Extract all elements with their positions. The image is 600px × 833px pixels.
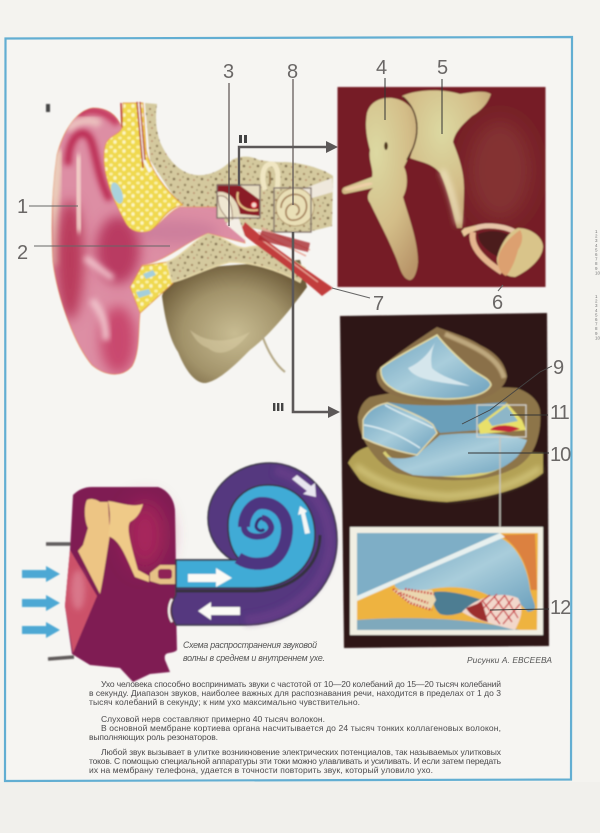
yellow rim of lower whorl xyxy=(384,448,520,476)
deep red helix top xyxy=(78,110,118,124)
mastoid bone mass xyxy=(162,260,307,383)
margin line numbers upper: 3 xyxy=(595,238,598,243)
white arrow in blue coil xyxy=(298,506,310,534)
diagram caption: волны в среднем и внутреннем ухе. xyxy=(183,653,325,663)
paragraph 3: их на мембрану телефона, удается в точности повторить звук, который уловило ухо. xyxy=(89,765,433,775)
roman numeral III xyxy=(273,403,283,411)
diagram: sound wave propagation xyxy=(22,463,337,682)
diagram caption xyxy=(183,640,325,663)
diagram caption: Схема распространения звуковой xyxy=(183,640,317,650)
white arrow upper coil xyxy=(292,475,316,497)
malleus xyxy=(342,98,418,280)
body text xyxy=(89,679,502,775)
margin line numbers lower: 8 xyxy=(595,326,598,331)
lobe colour xyxy=(100,306,136,374)
stapes interior shadow xyxy=(478,231,510,258)
inset red cells xyxy=(393,589,434,610)
label 6 with leader: 6 xyxy=(492,292,503,314)
stapes schematic xyxy=(150,565,176,584)
paragraph 3 xyxy=(89,747,502,775)
label 12 with leader: 12 xyxy=(550,597,571,619)
purple coil shading xyxy=(245,470,330,620)
stapes footplate xyxy=(497,228,543,277)
lower temporal bone xyxy=(167,233,305,282)
inset left cell rows xyxy=(392,590,436,610)
blue tube and whorl xyxy=(176,485,315,588)
lower whorl tube folds xyxy=(364,405,433,448)
margin line numbers lower: 7 xyxy=(595,322,598,327)
inset orange tissue xyxy=(357,533,538,630)
inset upper right orange-red xyxy=(500,534,537,590)
box detail: red organ xyxy=(490,425,520,432)
label 4 with leader: 4 xyxy=(376,57,387,79)
highlighted frame xyxy=(477,405,526,437)
margin line numbers lower: 5 xyxy=(595,312,598,317)
incus schematic xyxy=(108,501,149,582)
malleus schematic xyxy=(78,499,110,594)
inset panel, white mount xyxy=(350,527,543,635)
middle ear cavity xyxy=(217,185,260,218)
box detail: blue duct xyxy=(488,406,518,426)
arrow to panel III xyxy=(293,232,340,418)
paragraph 2: Слуховой нерв составляют примерно 40 тысяч волокон. xyxy=(101,714,325,724)
margin line numbers upper: 9 xyxy=(595,266,598,271)
stapes hole xyxy=(158,569,172,579)
margin line numbers lower: 4 xyxy=(595,308,598,313)
semicircular canal xyxy=(263,164,278,190)
margin line numbers upper: 10 xyxy=(595,270,600,275)
malleus handle highlight xyxy=(345,183,372,190)
paragraph 1 xyxy=(89,679,501,707)
pale helix band xyxy=(68,121,100,130)
margin line numbers lower: 6 xyxy=(595,317,598,322)
tympanic ring rods xyxy=(46,544,74,659)
mid highlight xyxy=(85,258,113,278)
bundle stripes xyxy=(258,228,318,282)
inset red organ of Corti xyxy=(462,595,521,630)
blue sound arrow 3 xyxy=(22,622,60,638)
label 5 with leader xyxy=(437,57,448,134)
margin line numbers upper: 4 xyxy=(595,243,598,248)
cochlea outer purple coil xyxy=(172,463,337,625)
label 10 with leader xyxy=(468,444,571,466)
inset blue chamber xyxy=(395,538,535,612)
middle duct of lower whorl xyxy=(387,402,507,433)
lower whorl left blue tube xyxy=(363,403,437,455)
margin line numbers lower: 2 xyxy=(595,299,598,304)
paragraph 1: в секунду. Диапазон звуков, наиболее важных для распознавания речи, находится в пределах от 1 до 3 xyxy=(89,688,501,698)
white arrow in scala vestibuli xyxy=(188,568,232,587)
paragraph 3: токов. С помощью специальной аппаратуры эти токи можно улавливать и усиливать. И если затем передать xyxy=(89,756,502,766)
inset tunnel dark blue xyxy=(433,591,482,615)
label 5 with leader: 5 xyxy=(437,57,448,79)
panel III: cochlea section xyxy=(340,313,549,648)
round window arc xyxy=(169,599,172,622)
inset bottom blue band xyxy=(357,618,520,630)
label 1 with leader xyxy=(17,196,78,218)
inset background blue xyxy=(357,533,500,596)
paragraph 2 xyxy=(89,714,501,742)
roman numeral I xyxy=(46,104,50,112)
auditory nerve xyxy=(300,178,333,200)
label 4 with leader xyxy=(376,57,387,120)
tube lower dark line xyxy=(176,535,320,591)
inset light membrane xyxy=(357,533,505,601)
oval window ring xyxy=(251,202,257,208)
paragraph 1: тысяч колебаний в секунду; к ним ухо максимально чувствительно. xyxy=(89,697,360,707)
inset dark red mass xyxy=(466,602,488,622)
lower fat tissue xyxy=(130,262,173,313)
dark red background xyxy=(338,87,546,287)
blue vessel in upper tissue xyxy=(109,181,125,205)
white strip between fat and bone xyxy=(139,103,150,172)
canal colour xyxy=(140,221,214,243)
paragraph 2: выполняющих роль резонаторов. xyxy=(89,732,218,742)
inner fold arch xyxy=(68,133,110,200)
pinna shading xyxy=(55,110,219,374)
white arrow in scala tympani xyxy=(198,602,240,620)
inner purple spiral centre xyxy=(256,518,264,531)
concha shadow xyxy=(56,200,84,320)
blue sound arrow 2 xyxy=(22,595,60,611)
margin line numbers upper: 8 xyxy=(595,261,598,266)
panel II: auditory ossicles xyxy=(338,87,546,287)
cochlea coils xyxy=(281,194,307,220)
box detail: organ of Corti xyxy=(478,403,526,434)
label 8 with leader: 8 xyxy=(287,61,298,83)
footplate shade xyxy=(498,230,522,276)
label 11 with leader xyxy=(510,402,570,424)
blue sound arrow 1 xyxy=(22,566,60,582)
margin line numbers lower: 10 xyxy=(595,335,600,340)
joint dark line xyxy=(403,97,417,160)
dark background xyxy=(340,313,549,648)
inner purple spiral, second turn xyxy=(244,518,271,537)
ossicle sketch xyxy=(237,192,258,210)
lower whorl main blue chamber xyxy=(387,433,527,476)
box around middle ear xyxy=(217,185,260,218)
paragraph 3: Любой звук вызывает в улитке возникновение электрических потенциалов, так называемых улитковых xyxy=(101,747,502,757)
dome blue chamber xyxy=(381,335,491,399)
incus highlight xyxy=(442,170,459,224)
roman numeral II xyxy=(239,135,247,143)
highlight on mastoid xyxy=(190,330,250,353)
margin line numbers upper: 7 xyxy=(595,257,598,262)
margin line numbers lower: 9 xyxy=(595,331,598,336)
margin line numbers lower: 3 xyxy=(595,303,598,308)
pinna xyxy=(52,108,245,374)
dome shell xyxy=(377,327,507,403)
central antihelix highlight xyxy=(78,155,80,232)
label 2 with leader: 2 xyxy=(17,242,28,264)
thin process below mastoid xyxy=(262,335,285,372)
eardrum highlight xyxy=(71,570,85,610)
margin line numbers upper: 2 xyxy=(595,234,598,239)
stapes arch xyxy=(476,226,515,232)
bundle upper red block xyxy=(258,230,310,252)
stapes head xyxy=(461,225,478,237)
illustrator credit: Рисунки А. ЕВСЕЕВА xyxy=(467,655,552,665)
bone rim around the middle ear xyxy=(217,157,332,232)
pale outer rim xyxy=(55,150,60,265)
block colour variation xyxy=(125,501,165,569)
inner rim shadow xyxy=(96,216,140,284)
label 12 with leader xyxy=(490,597,571,619)
neurovascular bundle, red xyxy=(240,222,333,296)
label 3 with leader: 3 xyxy=(223,61,234,83)
base plate highlight xyxy=(356,466,540,496)
background lighter corner xyxy=(468,120,532,220)
arrow to panel II xyxy=(239,141,338,186)
line linking frame to inset xyxy=(499,437,501,527)
label 7 with leader: 7 xyxy=(373,293,384,315)
inset red fibers xyxy=(470,594,520,624)
upper fat tissue xyxy=(104,103,183,232)
semicircular canal shadow xyxy=(269,172,271,184)
middle ear block xyxy=(65,487,177,682)
margin line numbers upper: 6 xyxy=(595,252,598,257)
incus xyxy=(402,90,491,228)
malleus region xyxy=(218,196,232,226)
label 10 with leader: 10 xyxy=(550,444,571,466)
inner purple spiral, first turn xyxy=(238,503,287,564)
box around cochlea xyxy=(274,188,311,232)
upper temporal bone xyxy=(145,103,333,232)
figure I: cross-section of the ear xyxy=(46,102,333,383)
dome highlight xyxy=(445,334,504,378)
margin line numbers upper: 5 xyxy=(595,247,598,252)
eardrum wedge xyxy=(226,216,247,242)
red vessels at top of tissue xyxy=(121,102,145,168)
label 9 with leader xyxy=(462,357,564,424)
dome interior septum xyxy=(408,338,470,386)
eardrum xyxy=(65,550,97,653)
blue vessels in lower tissue xyxy=(136,270,156,298)
label 9 with leader: 9 xyxy=(553,357,564,379)
margin line numbers lower: 1 xyxy=(595,294,598,299)
antitragus highlight xyxy=(92,300,106,340)
red middle ear walls xyxy=(217,184,260,216)
lower whorl outer shell xyxy=(358,387,540,480)
label 11 with leader: 11 xyxy=(550,402,570,424)
margin line numbers upper: 1 xyxy=(595,229,598,234)
malleus dark notch xyxy=(384,142,388,150)
label 7 with leader xyxy=(332,288,384,315)
paragraph 1: Ухо человека способно воспринимать звуки с частотой от 10—20 колебаний до 15—20 тысяч колебаний xyxy=(101,679,501,689)
lower margin shading xyxy=(0,782,600,833)
cochlea base plate xyxy=(348,447,543,502)
cochlea shell xyxy=(276,188,314,226)
paragraph 2: В основной мембране кортиева органа насчитывается до 24 тысяч тонких коллагеновых волокон, xyxy=(101,723,501,733)
label 1 with leader: 1 xyxy=(17,196,28,218)
